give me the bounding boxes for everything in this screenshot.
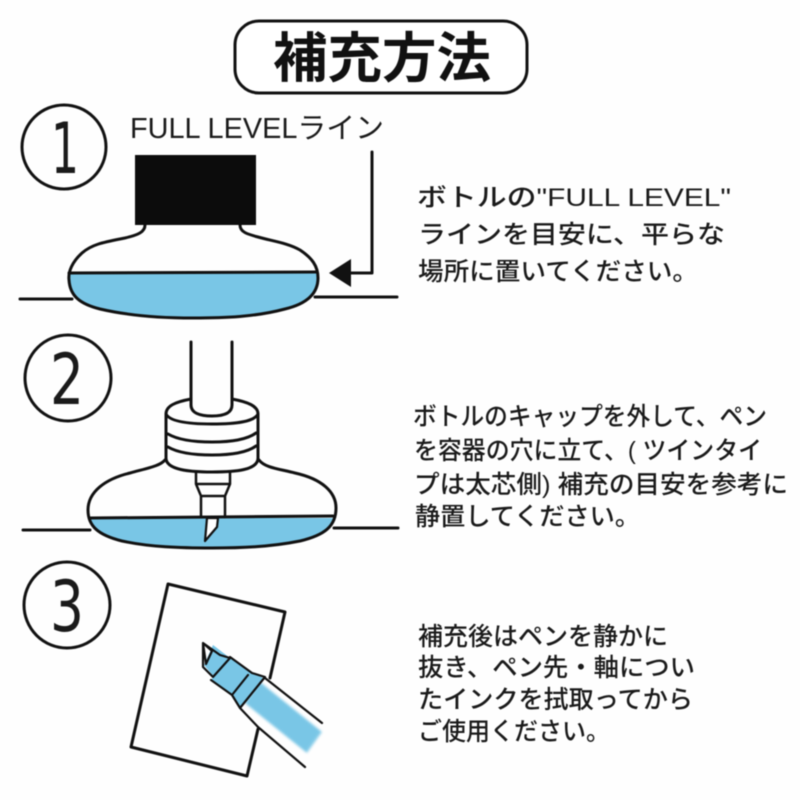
step 3 text — [418, 623, 695, 746]
marker pen — [203, 643, 322, 767]
step 2 number — [25, 335, 111, 421]
step 1 text: ボトルの"FULL LEVEL" — [417, 184, 731, 212]
step 1 text: ラインを目安に、平らな — [418, 221, 725, 249]
ground line 2 — [23, 528, 398, 530]
step 1 text: 場所に置いてください。 — [418, 258, 698, 286]
arrow to full level line — [329, 152, 372, 287]
step 2 text: プは太芯側) 補充の目安を参考に — [414, 471, 788, 499]
step 2 number: 2 — [50, 339, 84, 421]
title — [235, 21, 527, 93]
step 3 number — [24, 562, 110, 648]
step 1 bottle — [69, 155, 318, 318]
pen barrel — [191, 342, 232, 416]
paper sheet — [131, 584, 285, 776]
step 3 number: 3 — [50, 566, 84, 648]
step 2 text: を容器の穴に立て、( ツインタイ — [414, 437, 762, 465]
title: 補充方法 — [273, 29, 491, 89]
step 1 number — [22, 105, 106, 190]
pen nib — [196, 472, 230, 517]
step 2 text: ボトルのキャップを外して、ペン — [413, 403, 767, 431]
step 3 text: 補充後はペンを静かに — [418, 623, 668, 651]
step 3 text: 抜き、ペン先・軸につい — [418, 654, 695, 682]
ground line 1 — [20, 297, 397, 299]
step 2 text: 静置してください。 — [415, 503, 640, 531]
step 1 number: 1 — [51, 108, 79, 190]
step 3 text: ご使用ください。 — [418, 718, 610, 746]
nib tip — [205, 518, 218, 541]
step 1 text — [417, 184, 731, 286]
step 2 bottle — [88, 342, 336, 548]
bottle cap — [135, 155, 256, 225]
bottle cap — [166, 399, 258, 472]
step 3 text: たインクを拭取ってから — [418, 686, 693, 714]
step 2 text — [413, 403, 788, 531]
full level label: FULL LEVELライン — [130, 113, 384, 145]
